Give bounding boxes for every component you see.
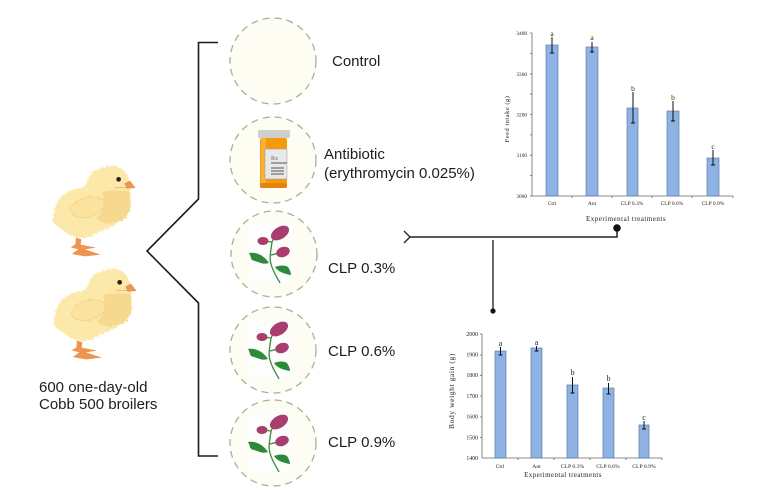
panel: CLP 0.6% circle (230, 307, 316, 393)
bar chart: body weight gain: c (642, 413, 646, 422)
label: antibiotic: Antibiotic (324, 146, 385, 163)
bar chart: feed intake: CLP 0.9% (702, 201, 725, 207)
bar chart: body weight gain: CLP 0.9% (632, 464, 656, 470)
icon: plant (248, 223, 292, 284)
bar chart: feed intake: 3100 (516, 153, 527, 159)
icon: chick top (52, 166, 136, 256)
icon: chick bottom (53, 269, 137, 359)
text: flock description: 600 one-day-old (39, 379, 147, 396)
bar chart: body weight gain: Ant (532, 464, 541, 470)
panel: control circle (230, 18, 316, 104)
text: flock description: Cobb 500 broilers (39, 396, 157, 413)
bar chart: feed intake: Experimental treatments (586, 215, 666, 223)
bar chart: body weight gain: Experimental treatments (524, 471, 602, 479)
bar chart: feed intake: Ant (588, 201, 597, 207)
bar chart: body weight gain: 2000 (466, 332, 478, 338)
text: flock description (39, 379, 157, 413)
bar chart: body weight gain: 1600 (466, 414, 478, 420)
connector arrow (404, 224, 621, 314)
bar chart: body weight gain: b (570, 368, 574, 377)
label: antibiotic: (erythromycin 0.025%) (324, 165, 475, 182)
bar chart: body weight gain: CLP 0.6% (596, 464, 620, 470)
bar chart: body weight gain: CLP 0.3% (561, 464, 585, 470)
panel: CLP 0.9% circle (230, 400, 316, 486)
bar chart: body weight gain: 1500 (466, 436, 478, 442)
bar chart: body weight gain: 1700 (466, 394, 478, 400)
bar chart: body weight gain: b (606, 374, 610, 383)
bar chart: body weight gain: 1800 (466, 373, 478, 379)
bar chart: body weight gain: Body weight gain (g) (447, 353, 456, 429)
icon: plant (247, 319, 291, 380)
bar chart: feed intake: 3400 (516, 31, 527, 37)
panel: CLP 0.3% circle (231, 211, 317, 297)
bar chart: feed intake: 3000 (516, 194, 527, 200)
bar chart: feed intake: CLP 0.6% (661, 201, 684, 207)
label: CLP 0.6%: CLP 0.6% (328, 343, 395, 360)
label: antibiotic (324, 146, 475, 182)
bar chart: body weight gain: 1900 (466, 352, 478, 358)
label: CLP 0.9%: CLP 0.9% (328, 434, 395, 451)
bar chart: body weight gain: a (499, 339, 503, 348)
bar chart: body weight gain: a (535, 338, 539, 347)
bar chart: body weight gain: 1400 (466, 456, 478, 462)
label: control: Control (332, 53, 380, 70)
bracket (147, 42, 218, 456)
bar chart: feed intake (504, 29, 733, 223)
panel: antibiotic circle (230, 117, 316, 203)
bar chart: feed intake: 3200 (516, 112, 527, 118)
bar chart: feed intake: CLP 0.3% (621, 201, 644, 207)
bar chart: feed intake: c (711, 142, 715, 151)
bar chart: feed intake: 3300 (516, 72, 527, 78)
bar chart: feed intake: a (550, 29, 554, 38)
bar chart: feed intake: b (671, 93, 675, 102)
bar chart: feed intake: Ctrl (548, 201, 557, 207)
bar chart: body weight gain: Ctrl (496, 464, 505, 470)
bar chart: feed intake: a (590, 33, 594, 42)
icon: plant (247, 412, 291, 473)
icon: pill bottle: Rx (271, 156, 278, 162)
label: CLP 0.3%: CLP 0.3% (328, 260, 395, 277)
bar chart: feed intake: Feed intake (g) (504, 96, 511, 142)
bar chart: feed intake: b (631, 84, 635, 93)
bar chart: body weight gain (447, 332, 662, 479)
